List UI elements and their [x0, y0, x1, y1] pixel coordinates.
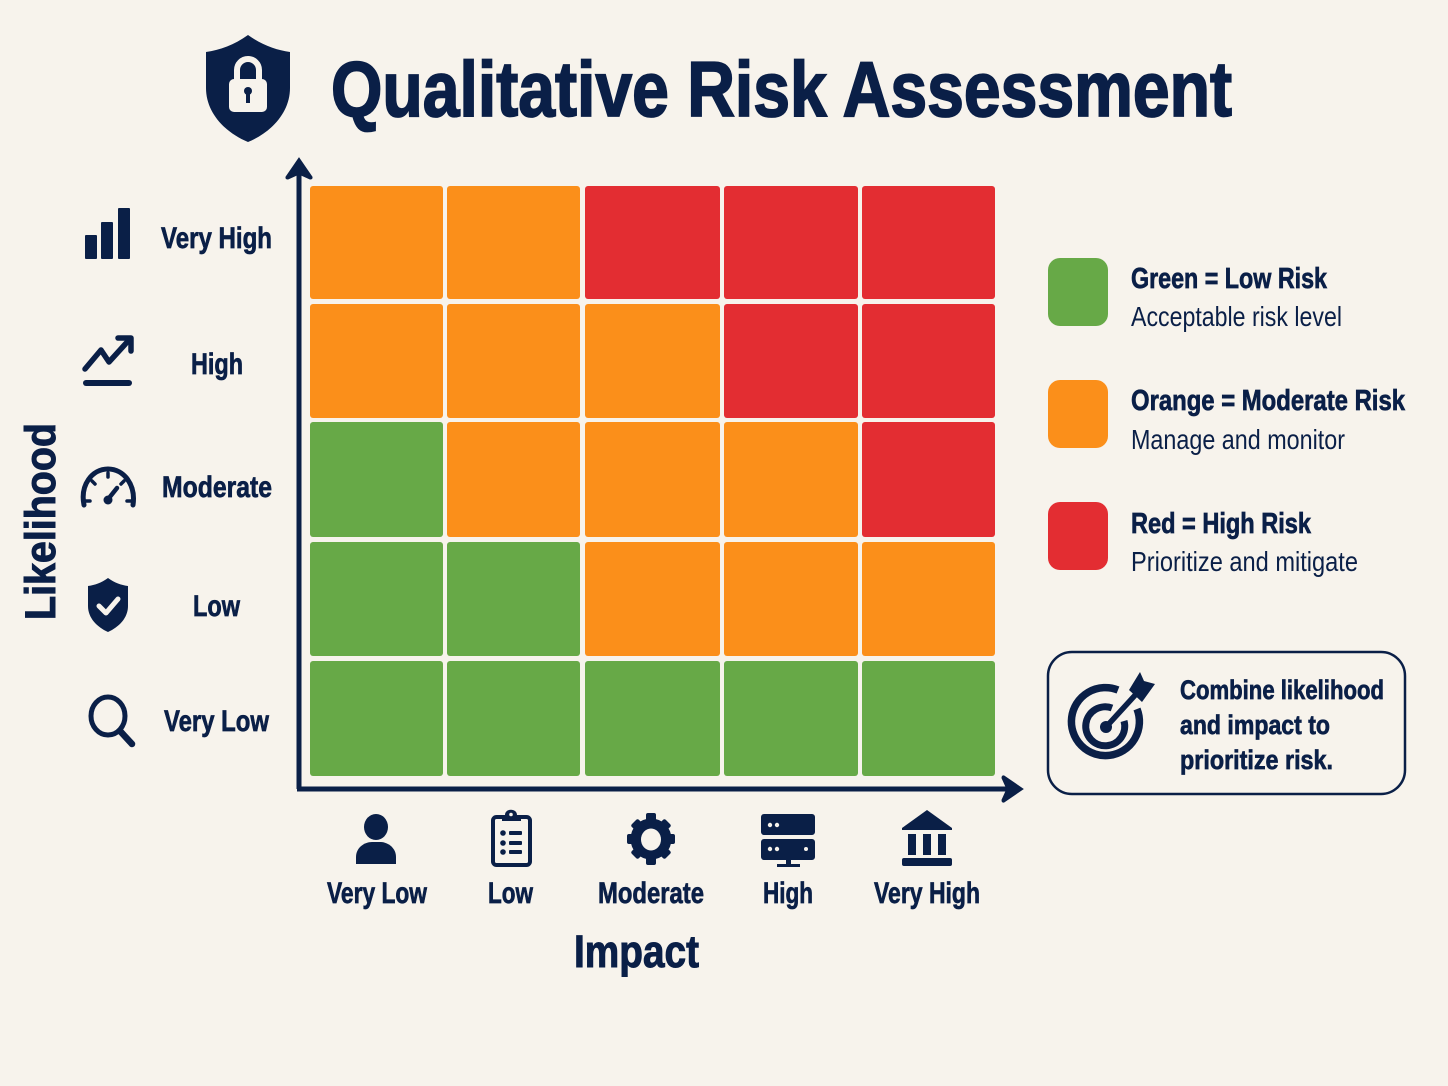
label: Low impact: Low [488, 877, 533, 910]
legend: high risk: Red = High Risk [1131, 508, 1312, 540]
arrow: likelihood axis [286, 158, 312, 789]
legend: moderate risk: Manage and monitor [1131, 424, 1345, 455]
icon: shield with check [88, 578, 128, 632]
label: Very Low likelihood: Very Low [164, 705, 270, 738]
callout: combine likelihood and impact [1048, 652, 1405, 794]
icon: bar chart [85, 208, 130, 259]
icon: trend line [85, 338, 131, 383]
icon: clipboard [493, 810, 530, 865]
callout: combine likelihood and impact: and impact to [1180, 710, 1330, 740]
legend: low risk: Green = Low Risk [1131, 263, 1328, 295]
label: Very High impact: Very High [874, 877, 980, 910]
icon: server [761, 814, 815, 867]
label: Very High likelihood: Very High [161, 222, 272, 255]
risk matrix grid [310, 186, 995, 776]
legend: high risk: Prioritize and mitigate [1131, 546, 1358, 577]
legend: low risk [1048, 258, 1342, 332]
legend: low risk: Acceptable risk level [1131, 301, 1342, 332]
legend: high risk [1048, 502, 1358, 577]
icon: person [356, 814, 396, 864]
icon: shield with padlock [206, 35, 290, 142]
icon: gear [627, 813, 675, 865]
callout: combine likelihood and impact: Combine likelihood [1180, 675, 1384, 705]
label: Very Low impact: Very Low [327, 877, 428, 910]
axis label: Likelihood: Likelihood [17, 423, 65, 620]
axis label: Impact: Impact [574, 926, 699, 977]
icon: bank building [902, 810, 952, 866]
title: Qualitative Risk Assessment [331, 45, 1232, 133]
callout: combine likelihood and impact: prioritize risk. [1180, 745, 1333, 775]
label: Moderate likelihood: Moderate [162, 471, 272, 504]
label: High likelihood: High [191, 348, 243, 381]
label: High impact: High [763, 877, 813, 910]
icon: target with arrow [1071, 672, 1155, 756]
legend: moderate risk [1048, 380, 1406, 455]
label: Low likelihood: Low [193, 590, 241, 623]
icon: magnifier [91, 697, 132, 744]
icon: gauge [83, 469, 133, 505]
label: Moderate impact: Moderate [598, 877, 704, 910]
arrow: impact axis [297, 776, 1023, 802]
